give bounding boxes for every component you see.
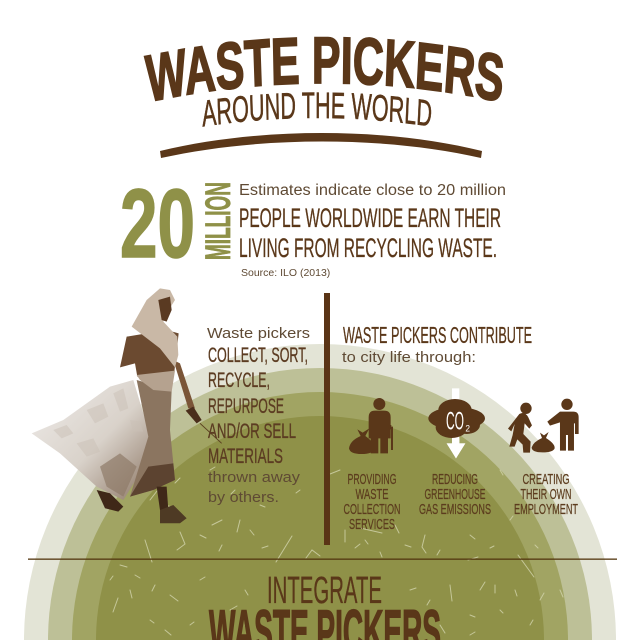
- text: what waste pickers do: RECYCLE,: [208, 369, 270, 392]
- label: creating employment: EMPLOYMENT: [514, 501, 578, 518]
- label: reducing emissions: [419, 471, 491, 518]
- statistic: 20 million: 20: [120, 169, 195, 278]
- label: waste collection: [344, 471, 400, 533]
- waste picker figure with sack: [32, 288, 222, 523]
- text: what waste pickers do: AND/OR SELL: [208, 420, 296, 443]
- icon: co2 cloud with arrow: CO: [446, 407, 464, 435]
- statistic description: Estimates indicate close to 20 million: [239, 182, 506, 199]
- label: waste collection: WASTE: [356, 486, 388, 503]
- label: waste collection: COLLECTION: [344, 501, 400, 518]
- icon: co2 cloud with arrow: [428, 388, 485, 458]
- icon: people and waste bag: [508, 399, 579, 453]
- subtitle: around the world: AROUND THE WORLD: [202, 92, 432, 127]
- statistic description: Source: ILO (2013): [241, 267, 330, 279]
- text: what waste pickers do: REPURPOSE: [208, 395, 284, 418]
- title underline curve: [160, 133, 482, 158]
- statistic description: [239, 182, 506, 279]
- vertical divider: [324, 293, 330, 545]
- label: creating employment: CREATING: [522, 471, 570, 488]
- heading: integrate waste pickers: [209, 570, 441, 640]
- label: creating employment: THEIR OWN: [520, 486, 572, 503]
- label: waste collection: PROVIDING: [348, 471, 396, 488]
- icon: co2 cloud with arrow: 2: [465, 423, 470, 433]
- text: what waste pickers do: thrown away: [208, 469, 301, 486]
- heading: contribution: to city life through:: [342, 349, 476, 366]
- text: what waste pickers do: COLLECT, SORT,: [208, 344, 308, 367]
- label: waste collection: SERVICES: [349, 516, 395, 533]
- label: creating employment: [514, 471, 578, 518]
- label: reducing emissions: GAS EMISSIONS: [419, 501, 491, 518]
- icon: person with waste bag: [349, 398, 393, 454]
- text: what waste pickers do: Waste pickers: [207, 325, 310, 342]
- text: what waste pickers do: MATERIALS: [208, 445, 283, 468]
- background concentric semicircles: [24, 344, 616, 640]
- heading: integrate waste pickers: INTEGRATE: [267, 570, 382, 612]
- statistic: 20 million: MILLION: [199, 182, 238, 260]
- text: what waste pickers do: by others.: [208, 489, 279, 506]
- label: reducing emissions: REDUCING: [432, 471, 478, 488]
- title: waste pickers: WASTE PICKERS: [144, 36, 504, 102]
- text: what waste pickers do: [207, 325, 310, 506]
- heading: contribution: [342, 322, 532, 366]
- horizontal divider: [28, 558, 617, 560]
- label: reducing emissions: GREENHOUSE: [424, 486, 486, 503]
